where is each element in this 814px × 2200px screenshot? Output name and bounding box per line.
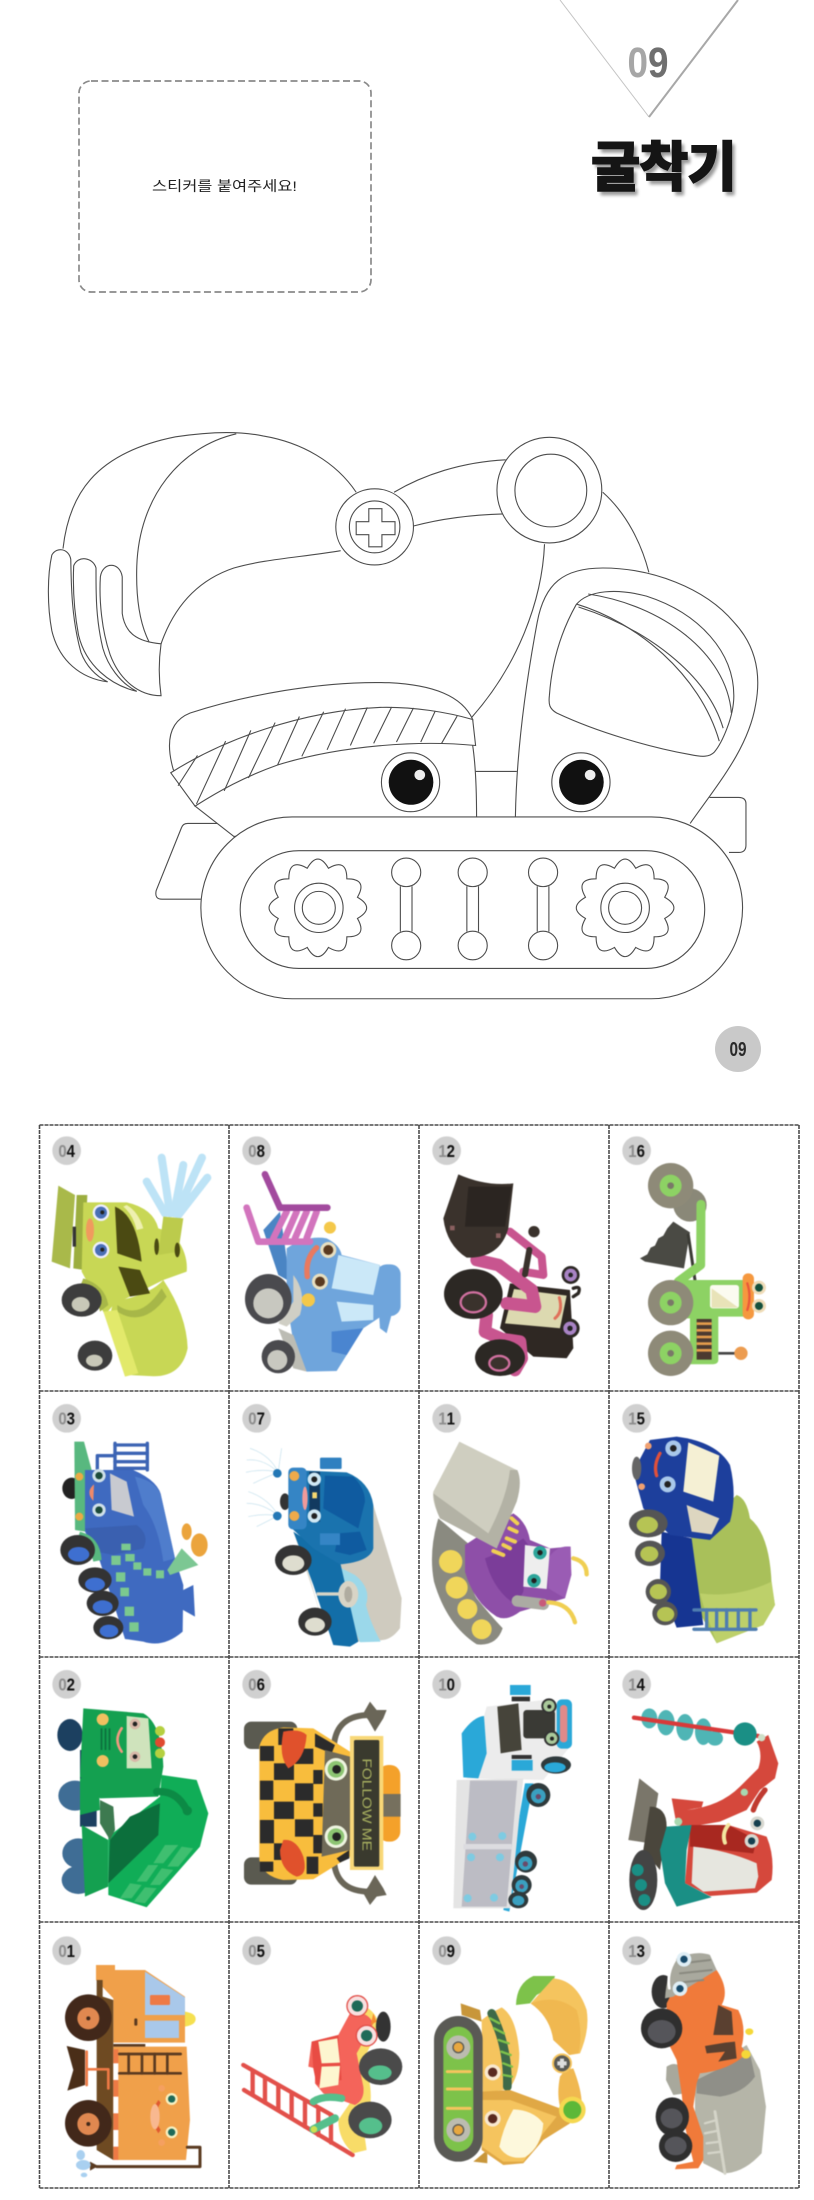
sticker 09: yellow excavator bbox=[432, 1936, 587, 2165]
page number badge bbox=[715, 1026, 761, 1072]
sticker 01: orange street sweeper bbox=[52, 1936, 200, 2177]
sticker 07: street sprayer: 07 bbox=[248, 1409, 265, 1429]
sticker 05: red ladder car: 05 bbox=[248, 1941, 265, 1961]
sticker 12: pink loader: 12 bbox=[438, 1141, 455, 1161]
bucket pin bbox=[336, 489, 413, 565]
sticker 09: yellow excavator: 09 bbox=[438, 1941, 455, 1961]
page number badge: 09 bbox=[730, 1039, 746, 1061]
sticker 14: drill excavator: 14 bbox=[628, 1675, 645, 1695]
sticker 05: red ladder car bbox=[242, 1936, 402, 2155]
sticker 10: flatbed truck bbox=[432, 1670, 572, 1912]
sticker cut grid bbox=[40, 1125, 799, 2188]
sticker 16: green tractor bbox=[622, 1136, 766, 1376]
sticker hint text: 스티커를 붙여주세요! bbox=[152, 178, 297, 194]
excavator line art bbox=[48, 432, 758, 999]
sticker 12: pink loader bbox=[432, 1136, 580, 1376]
boom ring bbox=[497, 437, 602, 543]
sticker 04: water tanker bbox=[52, 1136, 207, 1377]
track links bbox=[392, 858, 558, 960]
sticker 11: purple bulldozer bbox=[432, 1404, 587, 1645]
sticker 15: navy mixer truck bbox=[622, 1404, 775, 1643]
sticker 06: follow me checker car bbox=[242, 1670, 401, 1905]
sticker 03: blue spreader bbox=[52, 1404, 208, 1644]
right eye bbox=[552, 753, 610, 812]
sticker 16: green tractor: 16 bbox=[628, 1141, 645, 1161]
sticker 13: orange gray mixer: 13 bbox=[628, 1941, 645, 1961]
boom arm bbox=[394, 460, 649, 717]
sticker 14: drill excavator bbox=[622, 1670, 778, 1910]
sticker 08: shopping cart truck bbox=[242, 1136, 401, 1373]
left eye bbox=[381, 753, 440, 812]
number 09: 09 bbox=[628, 39, 668, 87]
sticker 10: flatbed truck: 10 bbox=[438, 1675, 455, 1695]
sticker 02: green dump truck: 02 bbox=[58, 1675, 75, 1695]
sign text: FOLLOW ME bbox=[359, 1758, 373, 1851]
sticker 11: purple bulldozer: 11 bbox=[438, 1409, 455, 1429]
sticker 08: shopping cart truck: 08 bbox=[248, 1141, 265, 1161]
sticker 04: water tanker: 04 bbox=[58, 1141, 75, 1161]
header triangle with number bbox=[560, 0, 738, 117]
right gear bbox=[576, 859, 674, 957]
sticker 03: blue spreader: 03 bbox=[58, 1409, 75, 1429]
side tabs bbox=[156, 797, 746, 899]
sticker 06: follow me checker car: 06 bbox=[248, 1675, 265, 1695]
title: 굴착기 bbox=[591, 123, 735, 202]
sticker placeholder bbox=[79, 81, 371, 292]
sticker 01: orange street sweeper: 01 bbox=[58, 1941, 75, 1961]
crawler track bbox=[201, 817, 743, 999]
sticker 15: navy mixer truck: 15 bbox=[628, 1409, 645, 1429]
bucket bbox=[48, 432, 356, 696]
sticker 07: street sprayer bbox=[242, 1404, 402, 1647]
sticker 02: green dump truck bbox=[52, 1670, 208, 1907]
left gear bbox=[269, 859, 367, 957]
engine body bbox=[170, 683, 477, 836]
cabin bbox=[476, 568, 758, 823]
sticker 13: orange gray mixer bbox=[622, 1936, 766, 2173]
